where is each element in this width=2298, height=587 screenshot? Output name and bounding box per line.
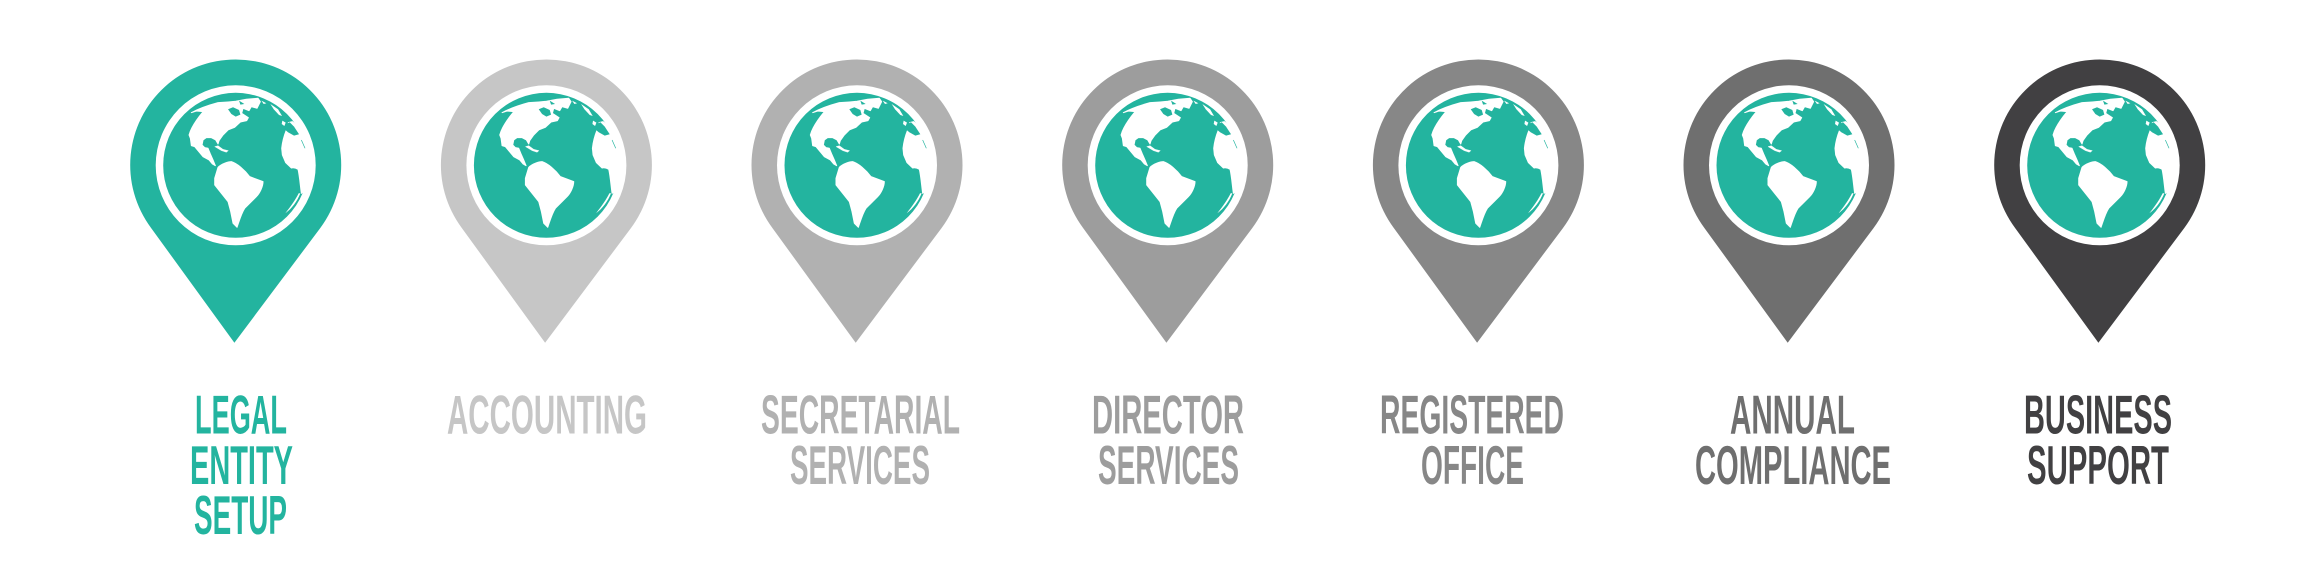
label: accounting: ACCOUNTING [447,384,647,446]
label: legal entity setup: SETUP [194,485,287,546]
label: director services [1092,384,1244,496]
pin: accounting [441,59,652,343]
label: legal entity setup: ENTITY [190,435,293,496]
pin: legal entity setup [130,59,341,343]
pin: secretarial services [752,59,962,343]
pin: annual compliance [1684,59,1895,343]
label: business support: SUPPORT [2027,435,2169,496]
pin: business support [1994,59,2205,343]
label: secretarial services: SECRETARIAL [761,384,960,446]
label: director services: SERVICES [1098,435,1239,496]
label: registered office: OFFICE [1421,435,1524,496]
label: business support [2024,384,2172,496]
label: annual compliance: ANNUAL [1730,384,1855,446]
pin: director services [1062,59,1273,343]
label: annual compliance: COMPLIANCE [1695,435,1891,496]
label: registered office: REGISTERED [1380,384,1564,446]
label: registered office [1380,384,1564,496]
label: business support: BUSINESS [2024,384,2172,446]
label: secretarial services [761,384,960,496]
label: legal entity setup [190,384,293,546]
label: annual compliance [1695,384,1891,496]
label: secretarial services: SERVICES [790,435,930,496]
pin: registered office [1373,59,1584,343]
label: legal entity setup: LEGAL [195,384,287,446]
label: director services: DIRECTOR [1092,384,1244,446]
